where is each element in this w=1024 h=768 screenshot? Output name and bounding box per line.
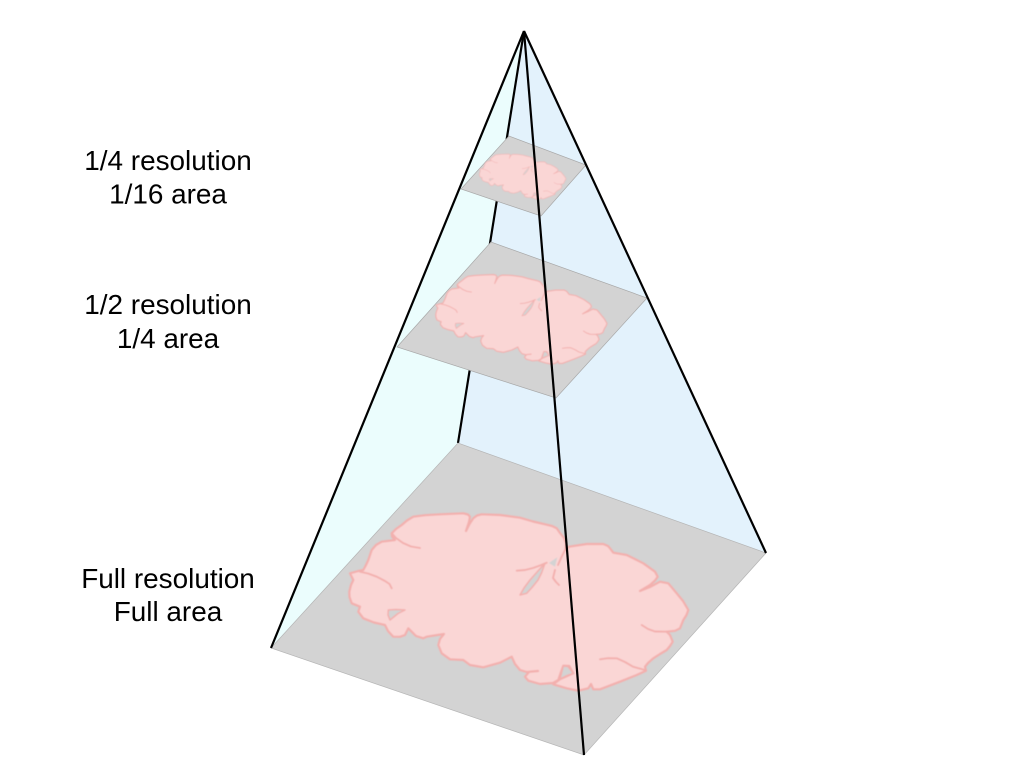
label: half resolution	[84, 289, 252, 354]
label: half resolution: 1/2 resolution	[84, 289, 252, 320]
full resolution plane with brain	[271, 443, 766, 755]
label: full resolution: Full area	[114, 596, 223, 627]
label: quarter resolution: 1/16 area	[109, 178, 227, 210]
back edge of pyramid	[458, 31, 524, 443]
pyramid right back face	[458, 31, 766, 553]
quarter resolution plane with brain	[461, 136, 586, 216]
label: half resolution: 1/4 area	[117, 323, 220, 354]
label: full resolution	[81, 563, 255, 627]
front edges of pyramid	[271, 31, 766, 755]
label: quarter resolution	[84, 145, 252, 210]
label: full resolution: Full resolution	[81, 563, 255, 594]
pyramid left back face	[271, 31, 524, 648]
label: quarter resolution: 1/4 resolution	[84, 145, 252, 176]
half resolution plane with brain	[397, 242, 647, 398]
